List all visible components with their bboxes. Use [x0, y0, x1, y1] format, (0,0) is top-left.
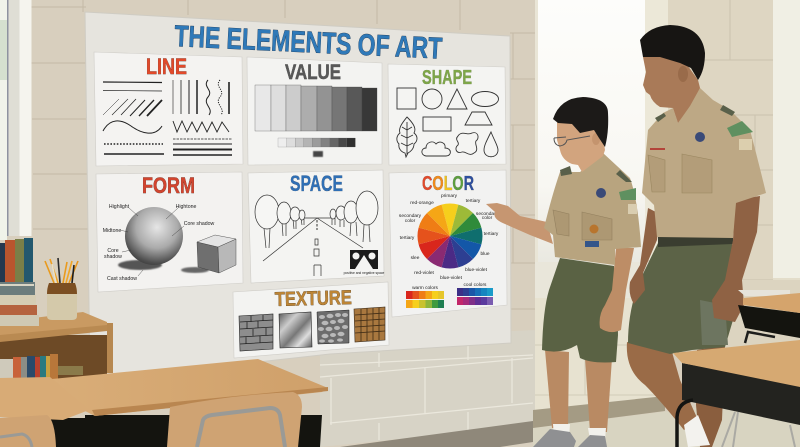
panel: shape — [388, 64, 506, 165]
texture: woven basket — [354, 307, 385, 342]
pencil jar — [45, 258, 78, 320]
panel: space — [248, 170, 385, 283]
positive and negative space icon: positive and negative space — [344, 271, 385, 275]
shape outlines — [397, 88, 498, 157]
texture: stone wall — [239, 314, 273, 351]
shorts — [628, 238, 733, 354]
chair: centre — [167, 392, 302, 447]
sphere labels: Highlight — [109, 204, 130, 210]
color wheel labels: secondary — [399, 213, 422, 219]
stacked books — [0, 282, 39, 326]
boy: older scout — [627, 25, 766, 447]
right wall and window — [664, 0, 800, 350]
color wheel labels: color — [405, 218, 416, 224]
shorts — [542, 258, 618, 362]
neck and face — [643, 55, 700, 123]
sphere labels: Cast shadow — [107, 276, 137, 282]
back leg — [696, 345, 725, 447]
color wheel labels: primary — [441, 193, 458, 199]
back window — [535, 0, 670, 410]
lower wall blocks — [320, 330, 536, 447]
sphere labels: Core shadow — [184, 221, 215, 227]
upright books — [0, 238, 33, 282]
heading: form: FORM — [142, 173, 195, 198]
glasses — [554, 136, 590, 146]
color wheel labels: slee — [411, 255, 420, 261]
color wheel labels: tertiary — [466, 198, 481, 204]
sphere labels — [103, 204, 215, 282]
heading: space: SPACE — [290, 171, 343, 196]
desk: centre — [52, 359, 328, 447]
desk: left — [0, 377, 92, 447]
heading: shape: SHAPE — [422, 67, 472, 89]
front leg — [627, 342, 698, 430]
perspective road — [263, 218, 363, 276]
color wheel labels: secondary — [476, 211, 499, 217]
value scale: small — [278, 138, 355, 147]
title: THE ELEMENTS OF ART — [174, 20, 443, 66]
sphere labels: Midtone — [103, 228, 121, 234]
heading: texture: TEXTURE — [275, 287, 352, 311]
panel: line — [94, 52, 243, 166]
legs — [545, 350, 612, 432]
desk: front right — [673, 340, 800, 447]
texture: smooth metal — [279, 312, 312, 348]
wall display board — [85, 12, 511, 378]
heading: line: LINE — [146, 54, 187, 79]
right arm and hand — [712, 196, 760, 322]
trees — [255, 191, 378, 248]
color wheel labels — [399, 193, 499, 281]
color wheel labels: blue — [480, 251, 490, 257]
left window — [0, 0, 32, 240]
ear — [678, 66, 688, 82]
floor and baseboard — [340, 395, 800, 447]
warm colors swatches — [406, 285, 444, 308]
sphere labels: Hightone — [176, 204, 196, 210]
warm colors swatches: warm colors — [412, 285, 439, 291]
panel: form — [96, 172, 243, 292]
panel: value — [247, 57, 382, 165]
color wheel labels: blue-violet — [465, 267, 488, 273]
desk: back right — [738, 290, 800, 343]
right arm and hand — [600, 248, 634, 332]
color wheel labels: tertiary — [484, 231, 499, 237]
color wheel labels: tertiary — [400, 235, 415, 241]
panel: color — [389, 170, 507, 317]
ear — [592, 133, 600, 145]
socks — [553, 424, 606, 440]
value scale: large — [255, 85, 377, 131]
panel: texture — [233, 282, 389, 358]
sphere labels: shadow — [104, 254, 122, 260]
shoes — [533, 429, 607, 447]
bookshelf — [0, 312, 113, 380]
belt — [658, 236, 733, 247]
books on lower shelf — [0, 354, 83, 379]
sphere labels: Core — [107, 248, 119, 254]
hair — [553, 97, 608, 147]
shirt pockets and patches — [553, 166, 637, 247]
pockets and patches — [648, 105, 753, 193]
cool colors swatches — [457, 282, 493, 305]
left arm — [630, 208, 660, 304]
heading: value: VALUE — [285, 61, 341, 84]
cargo pocket — [700, 300, 728, 345]
pointing arm and hand — [486, 203, 553, 244]
color wheel labels: red-orange — [410, 200, 434, 206]
line samples — [103, 80, 232, 155]
texture: pebbles — [317, 310, 349, 344]
color wheel labels: red-violet — [414, 270, 435, 276]
boy: younger scout — [486, 97, 641, 447]
chair: left — [0, 415, 56, 447]
cool colors swatches: cool colors — [464, 282, 487, 288]
color wheel labels: blue-violet — [440, 275, 463, 281]
shaded cube — [181, 235, 236, 273]
hair — [640, 25, 705, 80]
shaded sphere — [125, 207, 183, 265]
shirt — [544, 153, 641, 265]
color wheel — [427, 213, 473, 259]
color wheel labels: color — [482, 215, 493, 221]
cast shadow — [118, 260, 162, 270]
heading: color: COLOR — [422, 173, 474, 195]
sock — [684, 415, 710, 447]
neck and face — [557, 118, 605, 172]
shirt — [642, 88, 766, 238]
